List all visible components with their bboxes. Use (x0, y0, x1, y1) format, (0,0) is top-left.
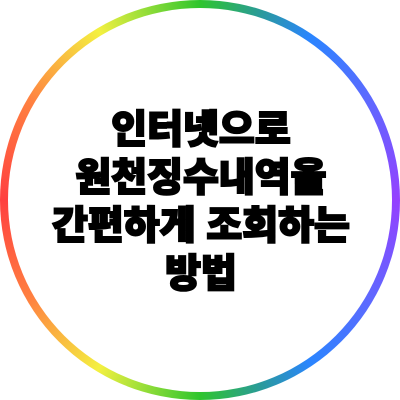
title: 간편하게 조회하는 (52, 205, 350, 248)
title (52, 108, 350, 296)
title: 방법 (165, 253, 237, 296)
title: 인터넷으로 (111, 109, 291, 152)
title: 원천징수내역을 (75, 157, 327, 200)
